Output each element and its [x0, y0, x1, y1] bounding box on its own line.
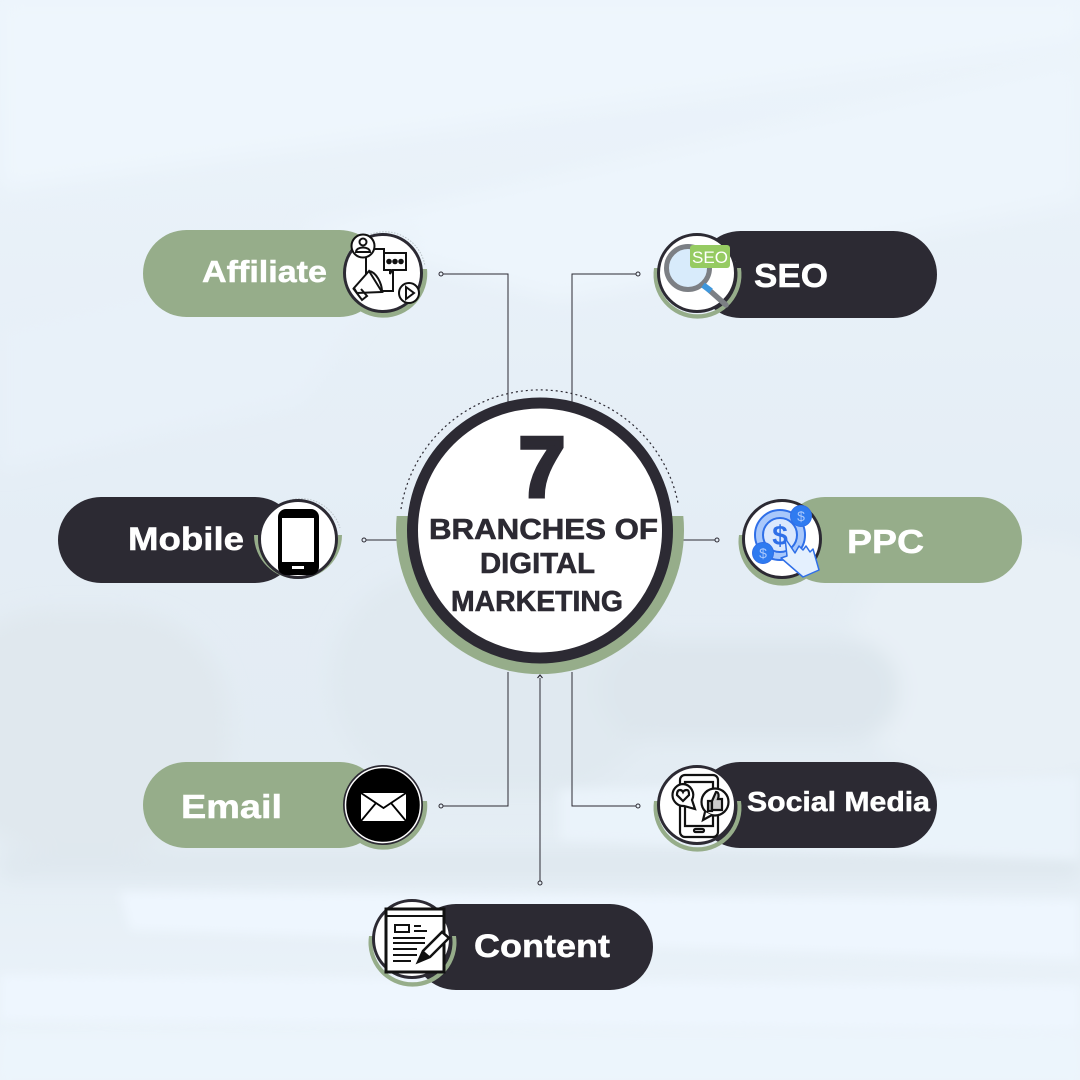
icon: pay per click hand and coins [752, 506, 819, 577]
Social Media badge accent [654, 801, 742, 852]
SEO badge dots [659, 236, 735, 262]
hub title [429, 420, 658, 618]
Mobile label: Mobile [128, 521, 244, 557]
Affiliate pill [143, 230, 383, 317]
PPC badge [744, 500, 820, 578]
Social Media pill [697, 762, 937, 848]
branch: Content [368, 900, 653, 990]
Affiliate badge accent [339, 269, 427, 318]
icon: pay per click hand and coins: $ [759, 545, 767, 561]
PPC badge accent [738, 535, 826, 586]
icon: marketing megaphone, chat and video [352, 234, 419, 303]
icon: phone with heart and like [672, 775, 728, 837]
Content badge [374, 900, 450, 978]
Email pill [143, 762, 383, 848]
Content pill [413, 904, 653, 990]
icon: pay per click hand and coins: $ [772, 520, 788, 551]
Affiliate badge dots [345, 232, 425, 266]
hub green half ring [396, 516, 684, 674]
PPC pill [782, 497, 1022, 583]
SEO badge [658, 234, 736, 312]
Mobile badge dots [262, 499, 340, 528]
Email label: Email [181, 788, 282, 825]
branch: Mobile [58, 497, 342, 583]
branch: Affiliate [143, 230, 427, 318]
branch: PPC [738, 497, 1022, 586]
hub circle [412, 403, 668, 658]
Social Media label: Social Media [747, 786, 930, 817]
central hub [396, 390, 684, 674]
Affiliate badge [344, 234, 422, 312]
Content label: Content [474, 928, 610, 964]
icon: envelope [361, 793, 406, 821]
SEO label: SEO [754, 257, 828, 294]
icon: magnifying glass with SEO tag [666, 245, 730, 305]
icon: pay per click hand and coins: $ [797, 508, 805, 524]
icon: document with pencil [386, 909, 449, 972]
Affiliate label: Affiliate [202, 254, 327, 289]
PPC label: PPC [847, 523, 924, 560]
branch: Social Media [654, 762, 937, 852]
Email badge [344, 766, 422, 844]
icon: magnifying glass with SEO tag: SEO [692, 248, 728, 267]
branch: Email [143, 762, 427, 850]
Social Media badge [658, 766, 736, 844]
icon: smartphone [278, 509, 319, 575]
hub title: BRANCHES OF [429, 514, 658, 546]
hub title: 7 [519, 420, 565, 514]
Content badge accent [368, 936, 456, 987]
SEO pill [697, 231, 937, 318]
hub title: MARKETING [451, 586, 623, 618]
branch: SEO [654, 231, 937, 319]
hub dotted arc [401, 390, 678, 509]
SEO badge accent [654, 268, 742, 319]
Mobile pill [58, 497, 298, 583]
Mobile badge [260, 500, 336, 578]
hub title: DIGITAL [480, 548, 595, 580]
connector lines [362, 272, 719, 885]
Email badge accent [339, 801, 427, 850]
Mobile badge accent [254, 535, 342, 579]
